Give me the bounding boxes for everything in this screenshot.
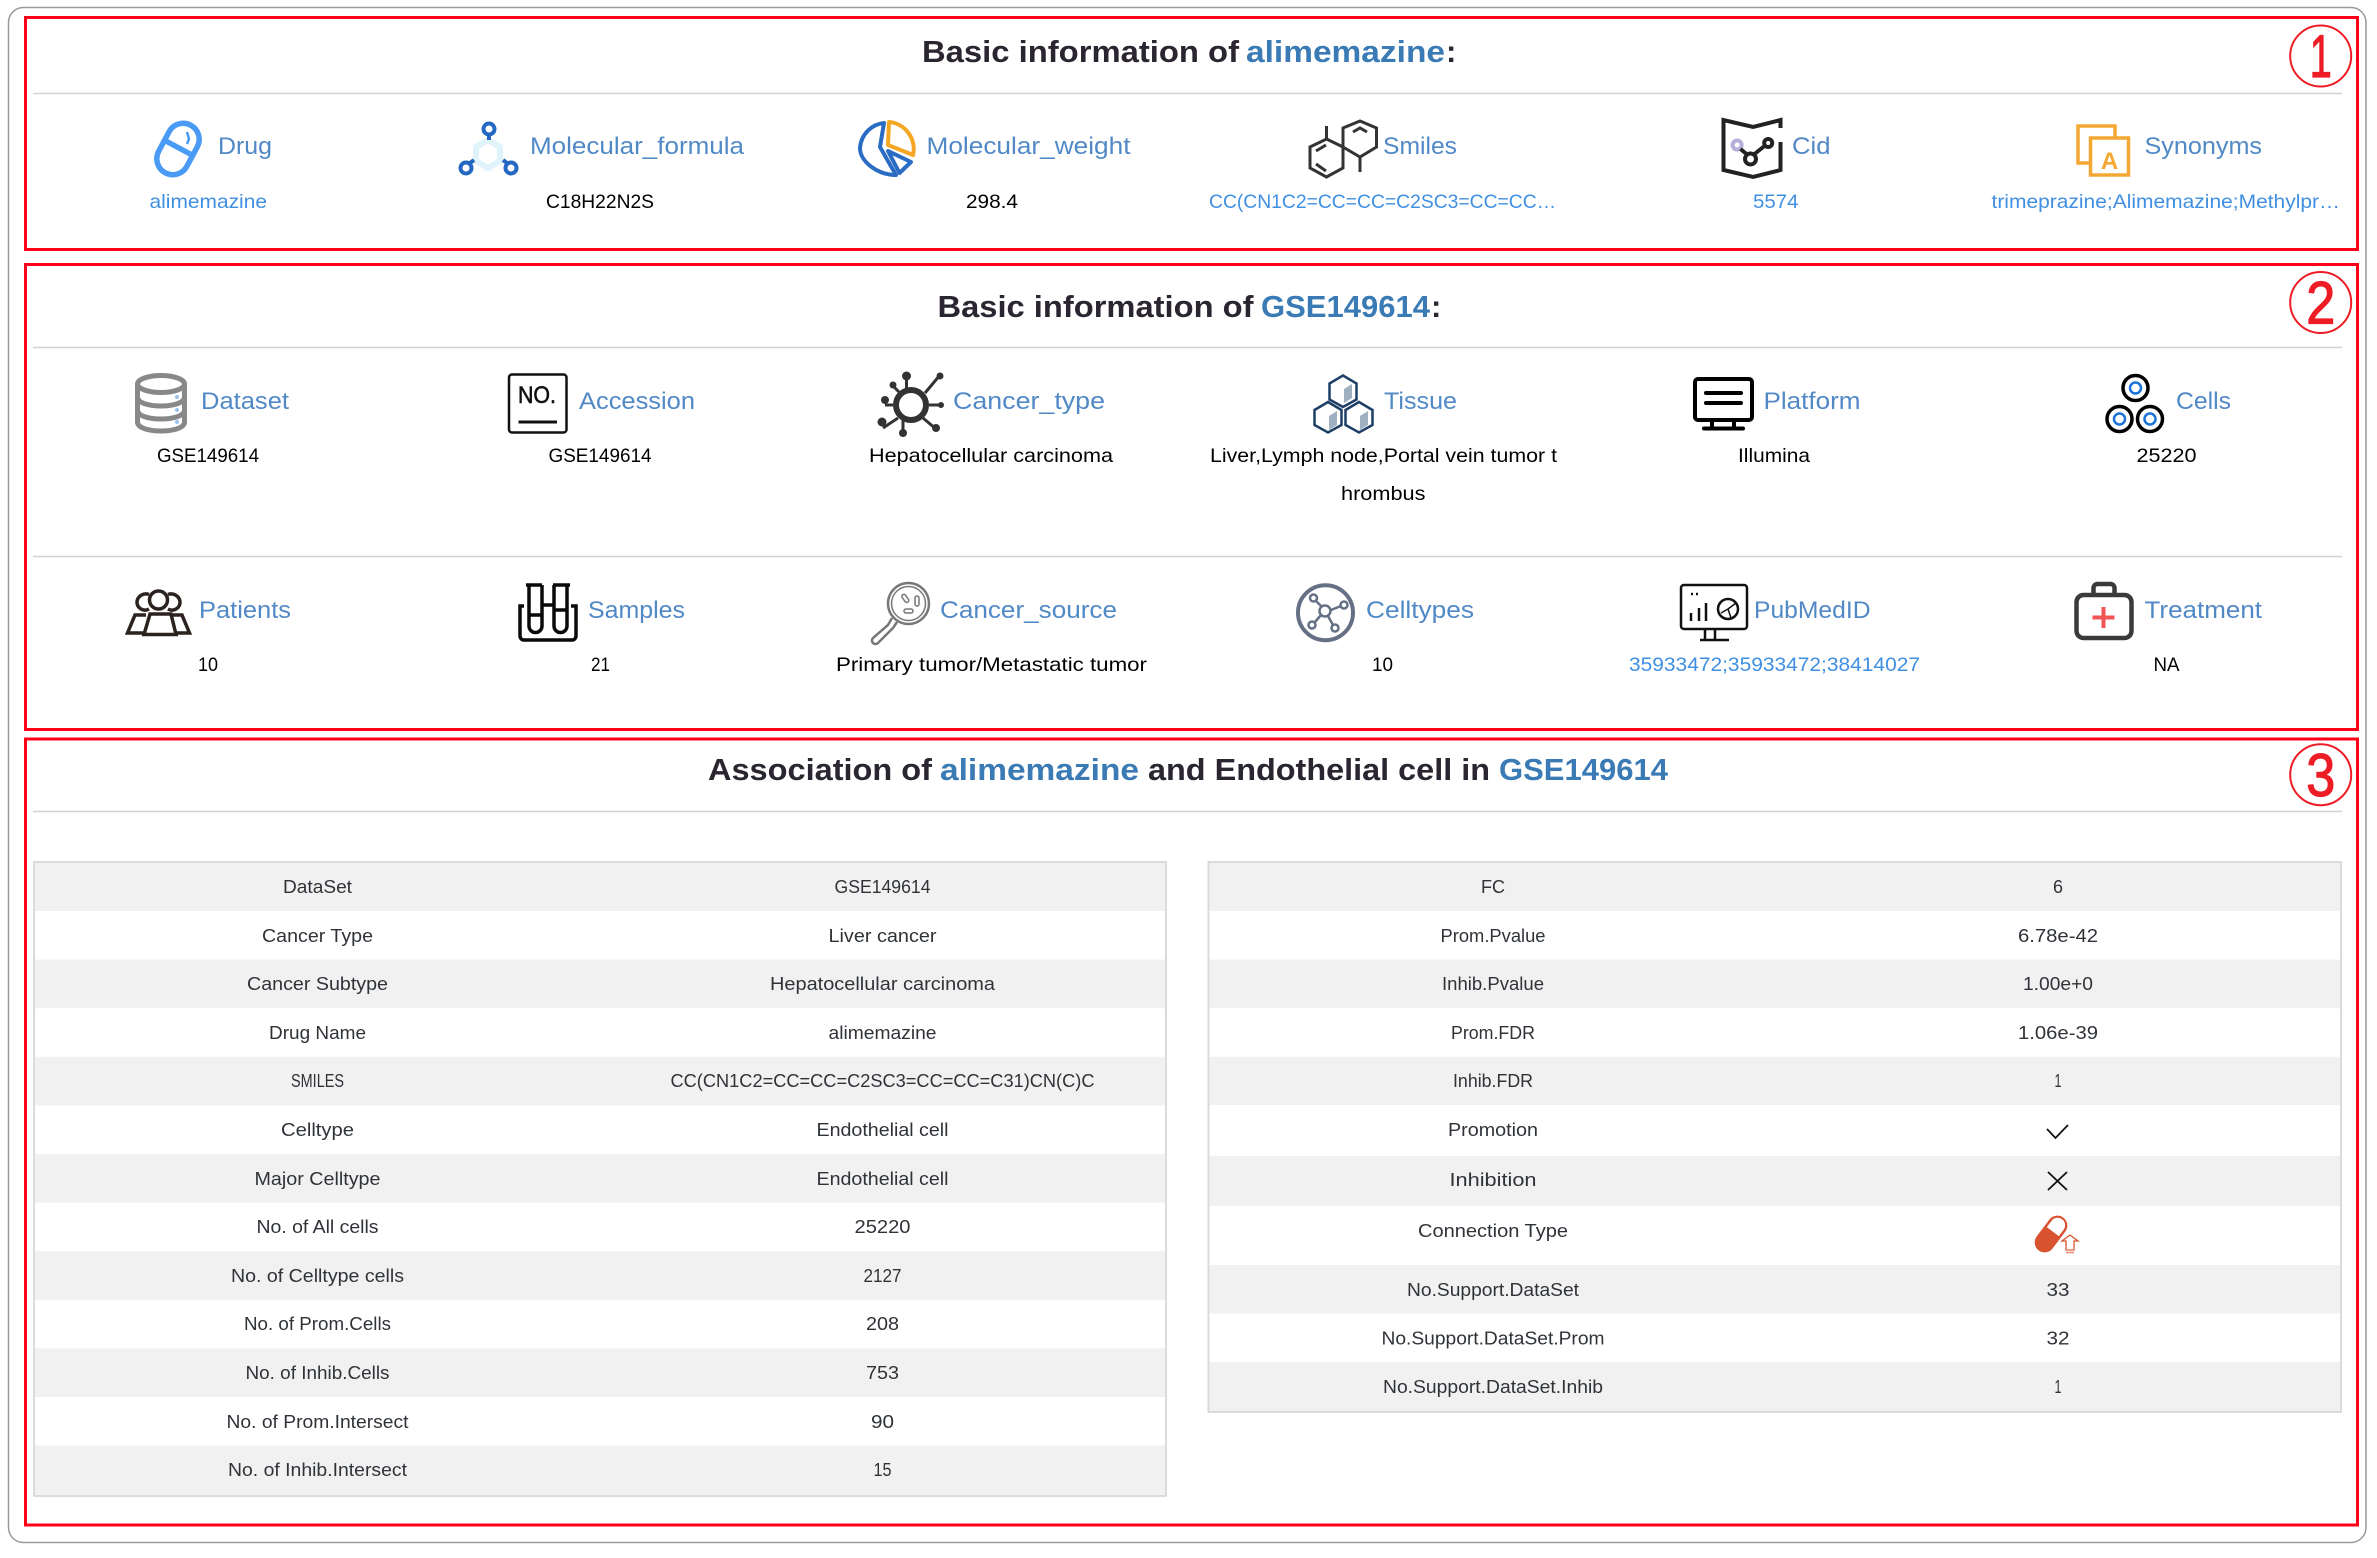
row: Inhib.Pvalue xyxy=(1442,973,2093,994)
icon: number card: NO. xyxy=(518,382,556,409)
heading 2: : xyxy=(1431,289,1441,324)
heading 1 xyxy=(922,34,1456,69)
row: No. of Prom.Cells xyxy=(244,1313,899,1334)
row: Drug Name: Drug Name xyxy=(269,1022,366,1043)
value: cancer type: Hepatocellular carcinoma xyxy=(869,445,1113,467)
icon: chemical structure xyxy=(1310,121,1376,177)
label: Tissue: Tissue xyxy=(1384,388,1457,415)
row: No.Support.DataSet.Inhib: 1 xyxy=(2054,1376,2062,1397)
row: No. of Inhib.Cells xyxy=(246,1362,899,1383)
row: No.Support.DataSet.Prom: No.Support.DataSet.Prom xyxy=(1382,1328,1604,1348)
row: Prom.Pvalue: Prom.Pvalue xyxy=(1440,925,1546,946)
row: No. of All cells: 25220 xyxy=(854,1216,910,1237)
item: Cancer source xyxy=(836,583,1148,676)
label: Cells: Cells xyxy=(2176,388,2231,415)
row: Cancer Subtype: Hepatocellular carcinoma xyxy=(770,973,996,994)
heading 1: Basic information of xyxy=(922,34,1240,69)
value: pubmed ids: 35933472;35933472;38414027 xyxy=(1629,654,1920,676)
label: Accession: Accession xyxy=(579,388,695,415)
row: No. of Celltype cells xyxy=(231,1265,902,1286)
row: No.Support.DataSet.Prom xyxy=(1382,1328,2070,1348)
row: No. of Prom.Intersect: 90 xyxy=(871,1411,894,1432)
icon: test tubes xyxy=(520,585,576,640)
heading 2 xyxy=(938,289,1441,324)
value: platform: Illumina xyxy=(1738,445,1810,467)
row: Cancer Type xyxy=(262,925,936,946)
row: Connection Type: Connection Type xyxy=(1418,1220,1568,1241)
label: PubMedID: PubMedID xyxy=(1754,597,1870,624)
row: FC: FC xyxy=(1481,876,1505,897)
item: Smiles xyxy=(1209,121,1556,213)
right table xyxy=(1208,862,2341,1412)
item: Cid xyxy=(1724,120,1830,213)
row: Major Celltype: Endothelial cell xyxy=(816,1168,948,1189)
icon: three cells xyxy=(2107,376,2162,432)
item: Cancer type xyxy=(869,372,1113,467)
row: Inhibition xyxy=(1450,1169,2067,1190)
icon: overlapping letter cards xyxy=(2078,126,2128,175)
icon: virus xyxy=(878,372,944,437)
row: Celltype: Endothelial cell xyxy=(816,1119,948,1140)
row: No. of All cells xyxy=(256,1216,910,1237)
icon: database xyxy=(138,376,184,431)
row: DataSet: DataSet xyxy=(283,876,352,897)
row: Prom.Pvalue xyxy=(1440,925,2098,946)
row: Inhibition: Inhibition xyxy=(1450,1169,1536,1190)
red frame 2 xyxy=(26,264,2358,730)
row: Inhib.FDR: 1 xyxy=(2054,1070,2062,1091)
heading 3: GSE149614 xyxy=(1499,752,1669,787)
label: Molecular_formula: Molecular_formula xyxy=(530,133,745,160)
row: No.Support.DataSet xyxy=(1407,1279,2070,1300)
circled number 3: 3 xyxy=(2306,742,2335,809)
red frame 3 xyxy=(26,739,2358,1525)
value: weight: 298.4 xyxy=(966,191,1018,213)
value: synonyms: trimeprazine;Alimemazine;Methylpr… xyxy=(1992,191,2340,213)
label: Smiles: Smiles xyxy=(1383,133,1457,160)
circled number 2 xyxy=(2290,270,2351,336)
row: Inhib.FDR: Inhib.FDR xyxy=(1453,1070,1533,1091)
panel 1: basic drug information xyxy=(26,18,2358,250)
label: Cancer_source: Cancer_source xyxy=(940,597,1117,624)
row: Prom.FDR: 1.06e-39 xyxy=(2018,1022,2098,1043)
icon: monitor xyxy=(1695,379,1752,428)
label: Samples: Samples xyxy=(588,597,685,624)
label: Cid: Cid xyxy=(1792,133,1830,160)
circled number 1: 1 xyxy=(2310,23,2332,90)
row: Prom.FDR: Prom.FDR xyxy=(1451,1022,1535,1043)
row: DataSet: GSE149614 xyxy=(834,876,930,897)
row: No. of Prom.Cells: 208 xyxy=(866,1313,899,1334)
item: Drug xyxy=(150,118,272,213)
heading 1: alimemazine xyxy=(1246,34,1445,69)
item: Molecular weight xyxy=(860,122,1131,213)
row: Inhib.Pvalue: Inhib.Pvalue xyxy=(1442,973,1544,994)
row: SMILES xyxy=(291,1070,1094,1091)
row: SMILES: SMILES xyxy=(291,1070,344,1091)
row: SMILES: CC(CN1C2=CC=CC=C2SC3=CC=CC=C31)CN(C)C xyxy=(670,1070,1094,1091)
value: cid: 5574 xyxy=(1753,191,1799,213)
item: Dataset xyxy=(138,376,289,467)
value: formula: C18H22N2S xyxy=(546,191,654,213)
value: drug: alimemazine xyxy=(150,191,267,213)
panel 2: basic dataset information xyxy=(26,264,2358,730)
icon: pill xyxy=(151,118,205,180)
row: FC: 6 xyxy=(2053,876,2063,897)
icon: magnifier over petri dish xyxy=(872,583,929,644)
row: Celltype xyxy=(281,1119,948,1140)
label: Platform: Platform xyxy=(1764,388,1860,415)
row: No.Support.DataSet.Inhib: No.Support.DataSet.Inhib xyxy=(1383,1376,1603,1397)
row: No.Support.DataSet.Prom: 32 xyxy=(2046,1328,2070,1348)
red frame 1 xyxy=(26,18,2358,250)
row: Promotion: Promotion xyxy=(1448,1119,1538,1140)
row: Celltype: Celltype xyxy=(281,1119,354,1140)
label: Patients: Patients xyxy=(199,597,291,624)
row: Drug Name: alimemazine xyxy=(828,1022,936,1043)
heading 3: and Endothelial cell in xyxy=(1148,752,1490,787)
icon: number card xyxy=(509,374,566,432)
label: Molecular_weight: Molecular_weight xyxy=(926,133,1131,160)
row: No.Support.DataSet: No.Support.DataSet xyxy=(1407,1279,1579,1300)
row: No. of Inhib.Intersect xyxy=(228,1459,892,1480)
heading 3: alimemazine xyxy=(940,752,1139,787)
row: Connection Type xyxy=(1418,1212,2078,1256)
label: Synonyms: Synonyms xyxy=(2144,133,2262,160)
value: smiles: CC(CN1C2=CC=CC=C2SC3=CC=CC… xyxy=(1209,191,1556,213)
row: Inhib.FDR xyxy=(1453,1070,2062,1091)
value: patients: 10 xyxy=(198,654,218,676)
item: PubMedID xyxy=(1629,585,1920,676)
row: No. of Celltype cells: 2127 xyxy=(864,1265,902,1286)
icon: molecule book xyxy=(1724,120,1780,177)
icon: overlapping letter cards: A xyxy=(2101,148,2118,175)
row: Cancer Type: Cancer Type xyxy=(262,925,373,946)
row: FC xyxy=(1481,876,2063,897)
item: Samples xyxy=(520,585,685,676)
row: No. of All cells: No. of All cells xyxy=(256,1216,378,1237)
row: No.Support.DataSet: 33 xyxy=(2046,1279,2070,1300)
icon: analytics monitor xyxy=(1681,585,1747,640)
icon: pie chart xyxy=(860,122,914,175)
icon: check mark xyxy=(2047,1125,2068,1138)
circled number 3 xyxy=(2290,742,2351,809)
icon: molecule xyxy=(460,124,516,174)
heading 3: Association of xyxy=(708,752,933,787)
label: Drug: Drug xyxy=(218,133,272,160)
row: No. of Inhib.Cells: 753 xyxy=(866,1362,899,1383)
row: Cancer Subtype xyxy=(247,973,996,994)
item: Cells xyxy=(2107,376,2231,467)
row: Inhib.Pvalue: 1.00e+0 xyxy=(2023,973,2093,994)
circled number 1 xyxy=(2290,23,2351,90)
value: samples: 21 xyxy=(591,654,610,676)
row: No. of Inhib.Intersect: 15 xyxy=(874,1459,892,1480)
row: No. of Celltype cells: No. of Celltype cells xyxy=(231,1265,404,1286)
row: Promotion xyxy=(1448,1119,2068,1140)
heading 2: Basic information of xyxy=(938,289,1254,324)
row: No. of Inhib.Intersect: No. of Inhib.Intersect xyxy=(228,1459,407,1480)
item: Tissue xyxy=(1210,376,1558,505)
row: Major Celltype: Major Celltype xyxy=(254,1168,380,1189)
row: No. of Inhib.Cells: No. of Inhib.Cells xyxy=(246,1362,390,1383)
row: Cancer Type: Liver cancer xyxy=(828,925,936,946)
left table xyxy=(34,862,1166,1496)
row: Prom.Pvalue: 6.78e-42 xyxy=(2018,925,2098,946)
value: cells: 25220 xyxy=(2136,445,2197,467)
item: Patients xyxy=(128,591,291,676)
item: Treatment xyxy=(2076,584,2262,676)
value: tissue continued: hrombus xyxy=(1341,483,1426,505)
value: celltypes: 10 xyxy=(1372,654,1393,676)
item: Molecular formula xyxy=(460,124,745,213)
row: No.Support.DataSet.Inhib xyxy=(1383,1376,2062,1397)
heading 3 xyxy=(708,752,1669,787)
row: No. of Prom.Intersect: No. of Prom.Intersect xyxy=(226,1411,408,1432)
label: Dataset: Dataset xyxy=(201,388,289,415)
row: Prom.FDR xyxy=(1451,1022,2098,1043)
icon: cross mark xyxy=(2048,1172,2067,1190)
row: Drug Name xyxy=(269,1022,936,1043)
icon: hexagonal cells xyxy=(1314,376,1372,432)
icon: red pill with up arrow xyxy=(2031,1212,2078,1256)
item: Accession xyxy=(509,374,695,467)
label: Celltypes: Celltypes xyxy=(1366,597,1474,624)
icon: cell network xyxy=(1298,585,1353,640)
heading 2: GSE149614 xyxy=(1261,289,1431,324)
row: No. of Prom.Cells: No. of Prom.Cells xyxy=(244,1313,391,1334)
circled number 2: 2 xyxy=(2306,270,2335,336)
icon: first aid kit xyxy=(2076,584,2132,638)
value: treatment: NA xyxy=(2154,654,2180,676)
panel 3: association table xyxy=(26,739,2358,1525)
label: Treatment: Treatment xyxy=(2144,597,2262,624)
value: dataset: GSE149614 xyxy=(157,445,259,467)
row: Cancer Subtype: Cancer Subtype xyxy=(247,973,388,994)
icon: group of people xyxy=(128,591,190,634)
item: Platform xyxy=(1695,379,1860,467)
row: Major Celltype xyxy=(254,1168,948,1189)
heading 1: : xyxy=(1446,34,1456,69)
item: Synonyms xyxy=(1992,126,2340,213)
row: No. of Prom.Intersect xyxy=(226,1411,894,1432)
value: accession: GSE149614 xyxy=(548,445,652,467)
value: tissue: Liver,Lymph node,Portal vein tumor t xyxy=(1210,445,1558,467)
label: Cancer_type: Cancer_type xyxy=(953,388,1105,415)
item: Celltypes xyxy=(1298,585,1474,676)
value: cancer source: Primary tumor/Metastatic tumor xyxy=(836,654,1148,676)
row: DataSet xyxy=(283,876,930,897)
